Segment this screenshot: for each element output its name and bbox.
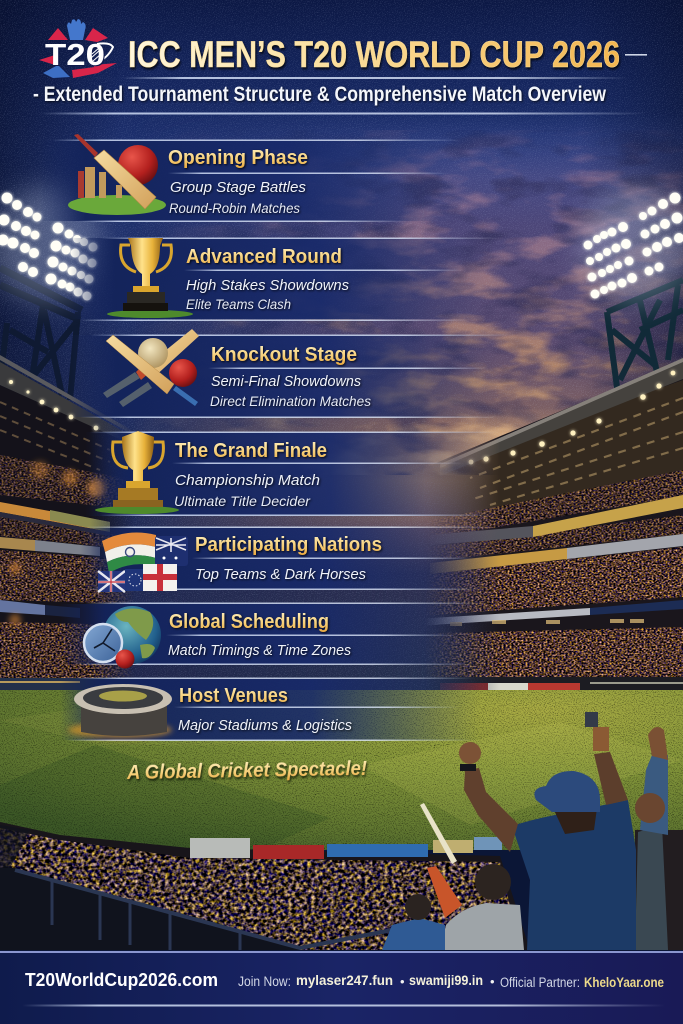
left floodlight tower (0, 187, 102, 400)
footer links: mylaser247.fun (296, 972, 393, 988)
heading: Global Scheduling (169, 611, 329, 633)
bottom crowd (0, 822, 530, 950)
heading: Knockout Stage (211, 344, 357, 366)
panel: participating nations (80, 526, 495, 592)
heading: The Grand Finale (175, 440, 327, 462)
fan: blue shirt (382, 894, 445, 950)
footer (0, 951, 683, 1024)
cricket field (0, 690, 683, 850)
icon: team flags (98, 533, 188, 592)
icon: crossed bats with balls (103, 329, 199, 407)
text: championship: Championship Match (175, 472, 320, 489)
footer site name: T20WorldCup2026.com (25, 970, 218, 990)
title dash (625, 54, 647, 56)
logo: T20 (39, 19, 117, 78)
fan: man with cap (459, 712, 636, 950)
text: high stakes: High Stakes Showdowns (186, 277, 349, 294)
text: top teams: Top Teams & Dark Horses (195, 566, 366, 583)
right floodlight tower (580, 187, 683, 395)
footer links: swamiji99.in (409, 972, 483, 988)
panel: knockout stage (70, 329, 510, 418)
panel: host venues (60, 678, 480, 741)
text: direct elimination: Direct Elimination Matches (210, 393, 371, 409)
fan: seated in white shirt (440, 864, 524, 950)
text: match timings: Match Timings & Time Zones (168, 642, 351, 659)
right stadium stands (429, 358, 683, 690)
stick held by fan (420, 803, 457, 864)
footer links (238, 972, 664, 990)
footer links: • (490, 974, 495, 989)
text: group stage: Group Stage Battles (170, 179, 306, 196)
panel: advanced round (70, 238, 500, 321)
panel: grand finale (85, 431, 500, 516)
text: semi final: Semi-Final Showdowns (211, 373, 361, 390)
fan: orange shirt (427, 866, 462, 918)
footer links: KheloYaar.one (584, 974, 664, 990)
footer links: Official Partner: (500, 975, 580, 990)
icon: globe, clock and ball (84, 606, 161, 668)
icon: gold trophy (107, 238, 193, 318)
perimeter banners (190, 837, 502, 859)
heading: Opening Phase (168, 147, 308, 169)
footer links: • (400, 974, 405, 989)
fan: far right (635, 727, 683, 950)
heading: Host Venues (179, 685, 288, 707)
background: night sky (0, 0, 683, 700)
icon: bat, ball and stumps (68, 134, 166, 215)
heading: Participating Nations (195, 534, 382, 556)
logo: T20: T20 (45, 37, 105, 72)
celebrating fans (382, 712, 683, 950)
footer links: Join Now: (238, 974, 291, 989)
title banner (33, 19, 647, 114)
text: elite teams: Elite Teams Clash (186, 296, 291, 312)
stand railing (15, 870, 392, 950)
panel: opening phase (40, 134, 462, 222)
icon: grand trophy (95, 431, 179, 514)
icon: stadium (68, 684, 172, 738)
text: major stadiums: Major Stadiums & Logistics (178, 717, 352, 734)
text: title decider: Ultimate Title Decider (174, 493, 311, 509)
left stadium stands (0, 355, 135, 691)
text: round robin: Round-Robin Matches (169, 200, 300, 216)
heading: Advanced Round (186, 246, 342, 268)
slogan: A Global Cricket Spectacle! (126, 758, 367, 784)
panel: global scheduling (60, 602, 485, 668)
